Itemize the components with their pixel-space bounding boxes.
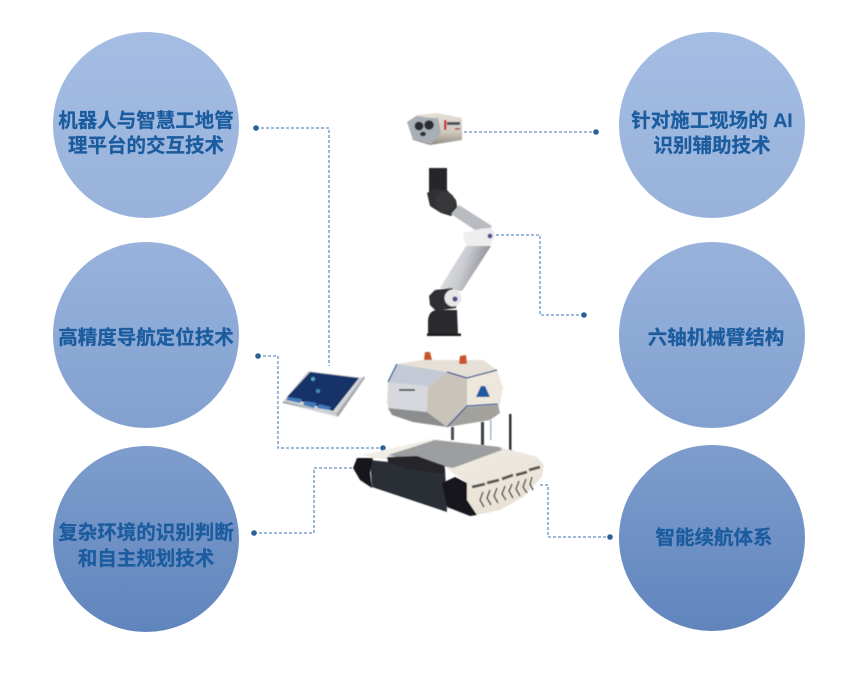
panel: positioning navigation: 高精度导航定位技术: [58, 326, 234, 349]
panel: human-machine interaction: [53, 32, 239, 218]
panel: environment recognition: [53, 446, 239, 632]
panel: human-machine interaction: 理平台的交互技术: [68, 134, 224, 157]
icon: robot body module: [387, 352, 503, 427]
panel: endurance system: [619, 445, 805, 631]
connector: environment to tracks: [251, 468, 354, 536]
connector: chassis to endurance: [540, 485, 613, 540]
panel: AI recognition: 识别辅助技术: [653, 134, 771, 157]
connector: camera to AI: [464, 129, 599, 135]
icon: tablet: [282, 371, 365, 417]
panel: AI recognition: 针对施工现场的 AI: [631, 110, 793, 132]
panel: human-machine interaction: 机器人与智慧工地管: [58, 109, 234, 132]
panel: environment recognition: 复杂环境的识别判断: [58, 521, 234, 544]
panel: environment recognition: 和自主规划技术: [78, 548, 215, 570]
connector: navigation to chassis: [255, 353, 386, 451]
icon: camera: [407, 113, 462, 145]
panel: AI recognition: [619, 32, 805, 218]
connector: interaction to tablet: [253, 125, 329, 366]
icon: tracked chassis: [353, 439, 544, 516]
icon: support posts and antenna: [451, 414, 513, 455]
panel: endurance system: 智能续航体系: [655, 526, 773, 549]
panel: six-axis arm: 六轴机械臂结构: [648, 326, 784, 349]
panel: positioning navigation: [53, 242, 239, 428]
connector: arm to six-axis: [496, 235, 587, 318]
panel: six-axis arm: [619, 242, 805, 428]
icon: robot arm: [427, 168, 495, 336]
